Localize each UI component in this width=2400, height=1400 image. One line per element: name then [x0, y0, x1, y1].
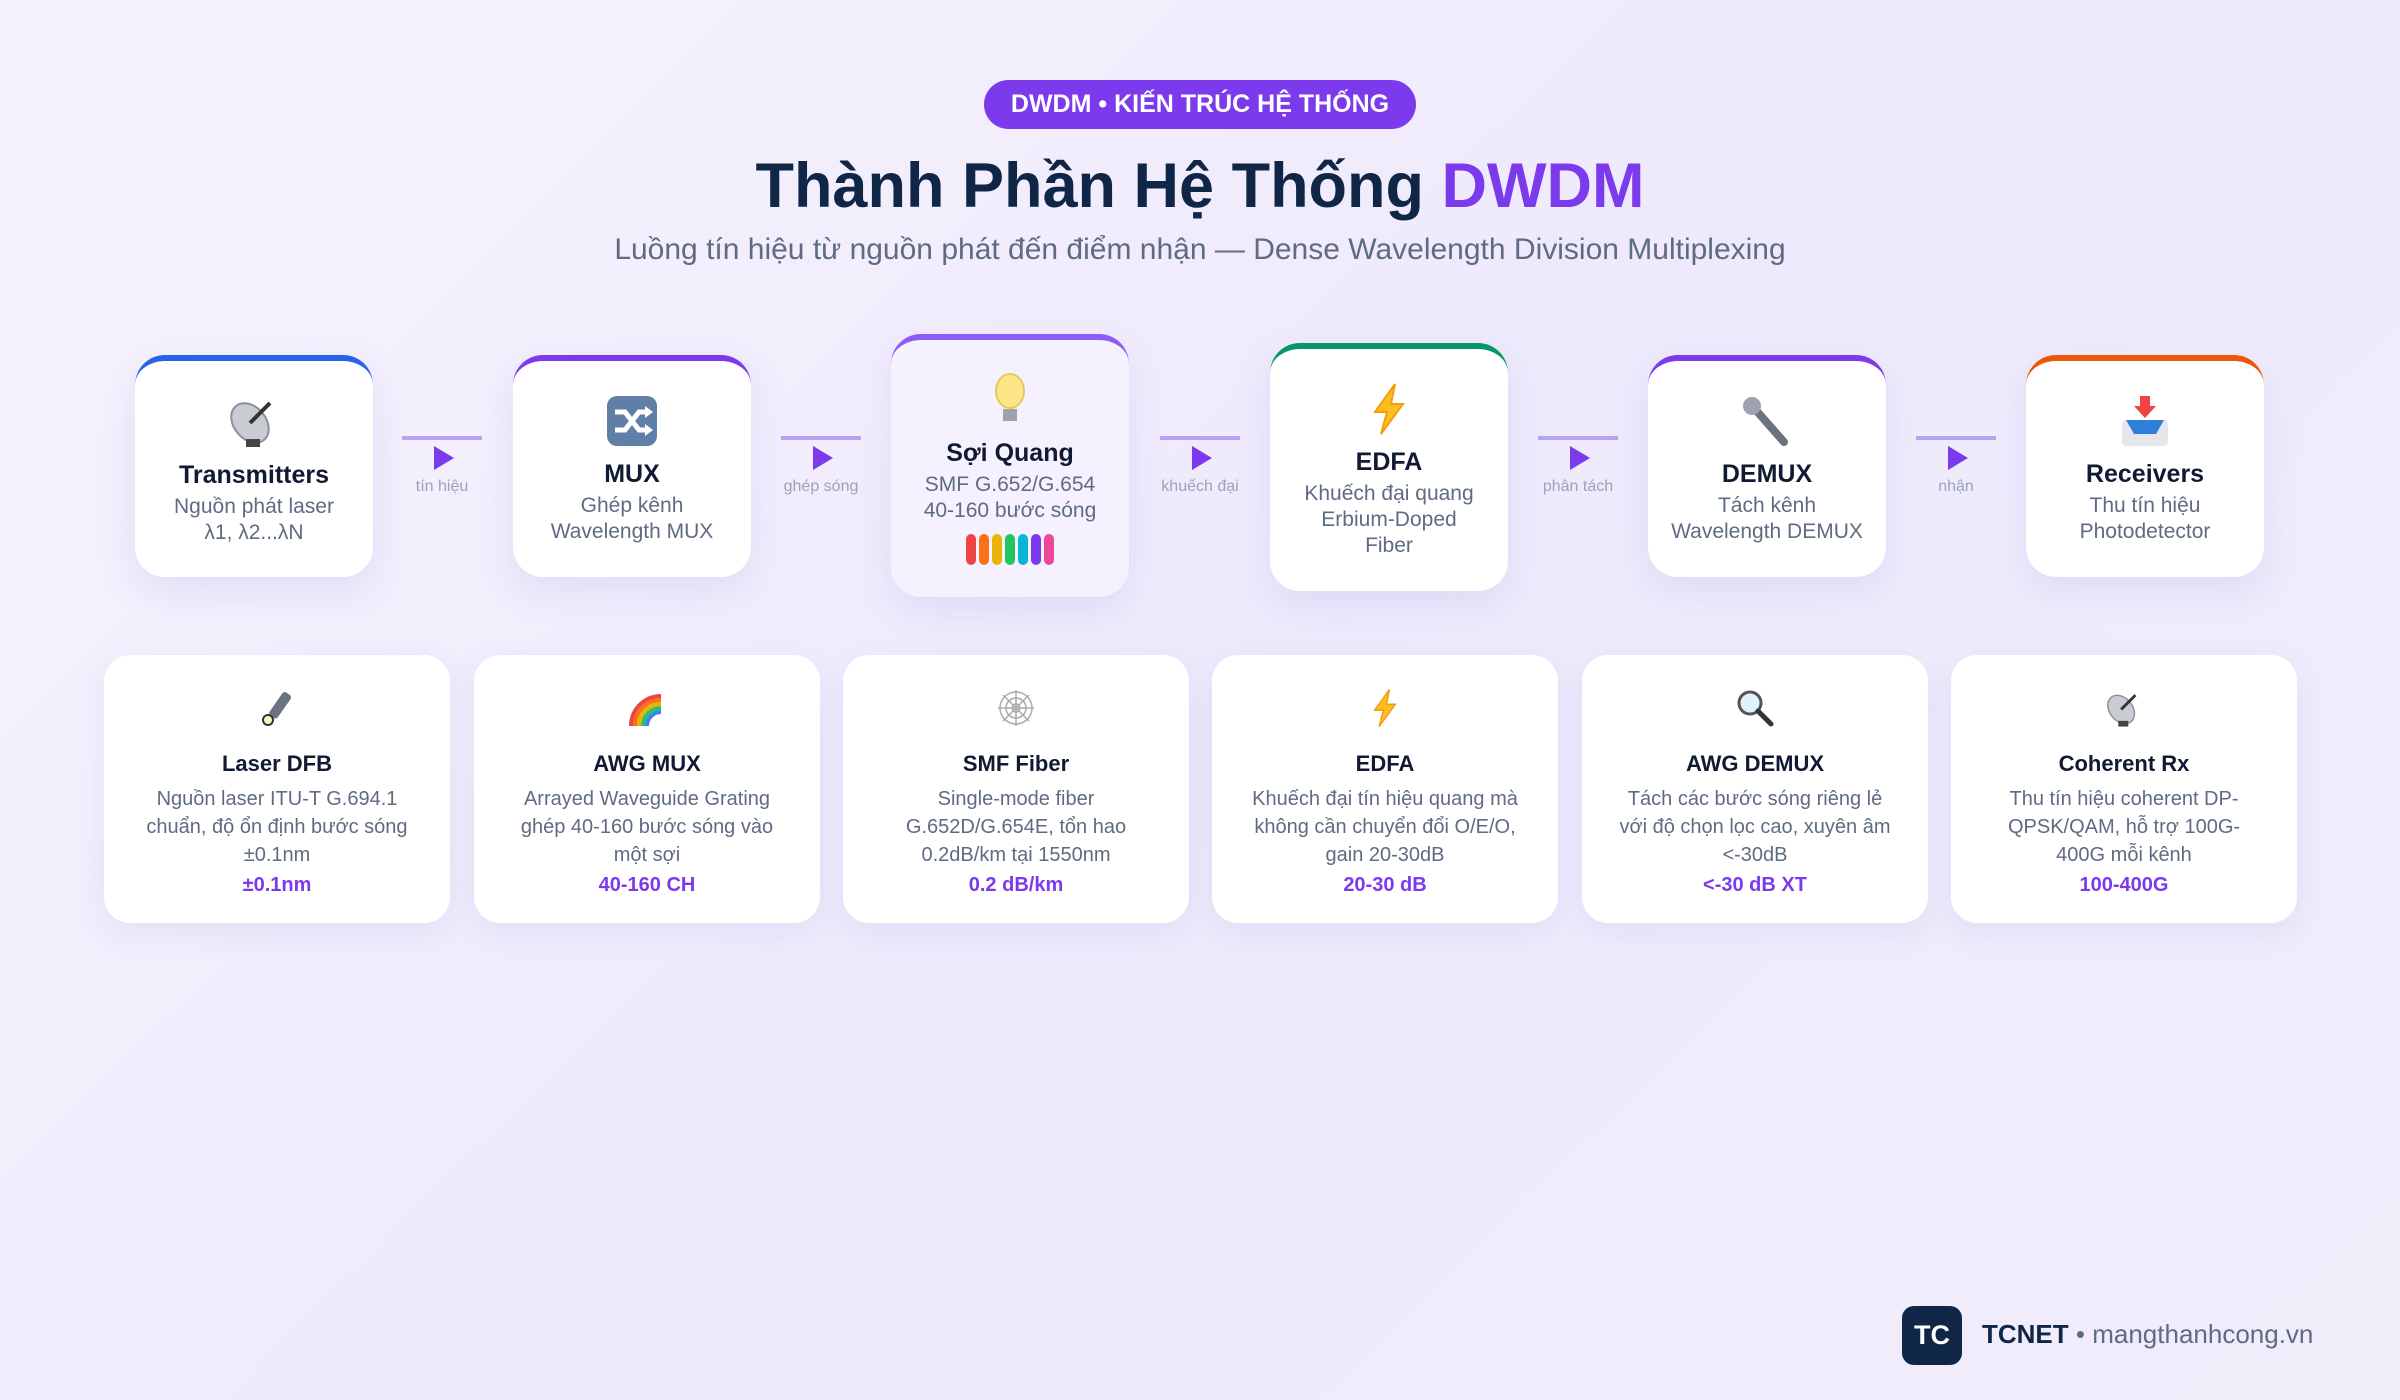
icon: lightning	[1373, 689, 1397, 727]
card: MUX: MUX	[604, 460, 660, 488]
card: Receivers: Receivers	[2086, 460, 2204, 488]
arrow: khuếch đại: khuếch đại	[1161, 478, 1239, 495]
arrow: nhận	[1916, 436, 1996, 495]
card: Receivers: Photodetector	[2080, 520, 2210, 542]
card: Receivers: Thu tín hiệu	[2090, 494, 2200, 516]
detail card: SMF Fiber: 0.2 dB/km	[969, 874, 1063, 896]
detail card: Coherent Rx: 100-400G	[2080, 874, 2168, 896]
card: EDFA: Fiber	[1365, 534, 1413, 556]
title: Thành Phần Hệ Thống DWDM	[756, 151, 1644, 221]
card: Sợi Quang: 40-160 bước sóng	[924, 498, 1096, 522]
icon: rainbow	[629, 694, 661, 726]
arrow: ghép sóng: ghép sóng	[784, 478, 858, 495]
card: MUX: Wavelength MUX	[551, 520, 713, 542]
arrow: tín hiệu	[402, 436, 482, 495]
card: Receivers	[2026, 355, 2264, 577]
detail card: Laser DFB: ±0.1nm	[243, 874, 311, 896]
icon: shuffle	[607, 396, 657, 446]
detail card: EDFA: 20-30 dB	[1343, 874, 1427, 896]
icon: web	[998, 690, 1034, 726]
card: EDFA: Erbium-Doped	[1321, 508, 1457, 530]
icon: wrench	[1743, 397, 1788, 446]
icon: magnifier	[1738, 690, 1774, 726]
detail card: EDFA: EDFA	[1356, 751, 1414, 776]
detail card: Coherent Rx	[1951, 655, 2297, 923]
detail card: Coherent Rx: Coherent Rx	[2059, 751, 2189, 776]
detail card: AWG DEMUX	[1582, 655, 1928, 923]
badge	[984, 80, 1416, 129]
detail card: EDFA: Khuếch đại tín hiệu quang mà không cần chuyển đổi O/E/O, gain 20-30dB	[1252, 788, 1518, 866]
detail card: AWG MUX: AWG MUX	[593, 751, 701, 776]
detail card: AWG MUX: 40-160 CH	[599, 874, 695, 896]
detail card: AWG DEMUX: <-30 dB XT	[1703, 874, 1807, 896]
card: Transmitters: λ1, λ2...λN	[204, 520, 304, 544]
icon: lightning	[1373, 383, 1405, 435]
footer logo: TC	[1914, 1320, 1950, 1350]
card: Sợi Quang	[891, 334, 1129, 597]
detail card: Laser DFB	[104, 655, 450, 923]
icon: bulb	[995, 373, 1025, 421]
detail card: Laser DFB: Nguồn laser ITU-T G.694.1 chuẩn, độ ổn định bước sóng ±0.1nm	[146, 788, 408, 866]
arrow: nhận: nhận	[1938, 478, 1974, 495]
detail card: AWG MUX	[474, 655, 820, 923]
card: DEMUX	[1648, 355, 1886, 577]
card: Transmitters	[135, 355, 373, 577]
card: MUX	[513, 355, 751, 577]
card: MUX: Ghép kênh	[581, 494, 683, 516]
detail card: AWG DEMUX: Tách các bước sóng riêng lẻ với độ chọn lọc cao, xuyên âm <-30dB	[1619, 788, 1891, 866]
detail card: SMF Fiber: Single-mode fiber G.652D/G.654E, tổn hao 0.2dB/km tại 1550nm	[906, 788, 1126, 866]
detail card: SMF Fiber	[843, 655, 1189, 923]
card: Sợi Quang: SMF G.652/G.654	[925, 472, 1095, 496]
subtitle: Luồng tín hiệu từ nguồn phát đến điểm nhận — Dense Wavelength Division Multiplexing	[614, 233, 1786, 266]
detail card: Coherent Rx: Thu tín hiệu coherent DP-QPSK/QAM, hỗ trợ 100G-400G mỗi kênh	[2008, 788, 2240, 866]
footer logo	[1902, 1306, 1962, 1365]
card: Transmitters: Transmitters	[179, 460, 329, 488]
card: DEMUX: DEMUX	[1722, 460, 1812, 488]
detail card: SMF Fiber: SMF Fiber	[963, 751, 1069, 776]
arrow: ghép sóng	[781, 436, 861, 495]
icon: satellite dish	[2107, 694, 2136, 727]
arrow: phân tách	[1538, 436, 1618, 495]
icon: inbox	[2122, 396, 2168, 446]
icon: flashlight	[262, 692, 291, 726]
card: DEMUX: Wavelength DEMUX	[1671, 520, 1863, 542]
detail card: AWG MUX: Arrayed Waveguide Grating ghép 40-160 bước sóng vào một sợi	[521, 788, 773, 866]
badge: DWDM • KIẾN TRÚC HỆ THỐNG	[1011, 90, 1389, 118]
arrow: phân tách: phân tách	[1543, 478, 1613, 495]
icon: satellite dish	[230, 402, 272, 447]
card: EDFA: Khuếch đại quang	[1304, 482, 1474, 504]
card: EDFA	[1270, 343, 1508, 591]
card: Transmitters: Nguồn phát laser	[174, 494, 334, 518]
card: EDFA: EDFA	[1356, 448, 1422, 476]
footer text: TCNET • mangthanhcong.vn	[1982, 1319, 2313, 1349]
arrow: khuếch đại	[1160, 436, 1240, 495]
card: Sợi Quang: Sợi Quang	[946, 438, 1074, 466]
detail card: EDFA	[1212, 655, 1558, 923]
detail card: Laser DFB: Laser DFB	[222, 751, 332, 776]
arrow: tín hiệu: tín hiệu	[416, 478, 468, 495]
color bars	[966, 534, 1054, 565]
detail card: AWG DEMUX: AWG DEMUX	[1686, 751, 1824, 776]
card: DEMUX: Tách kênh	[1718, 494, 1816, 516]
